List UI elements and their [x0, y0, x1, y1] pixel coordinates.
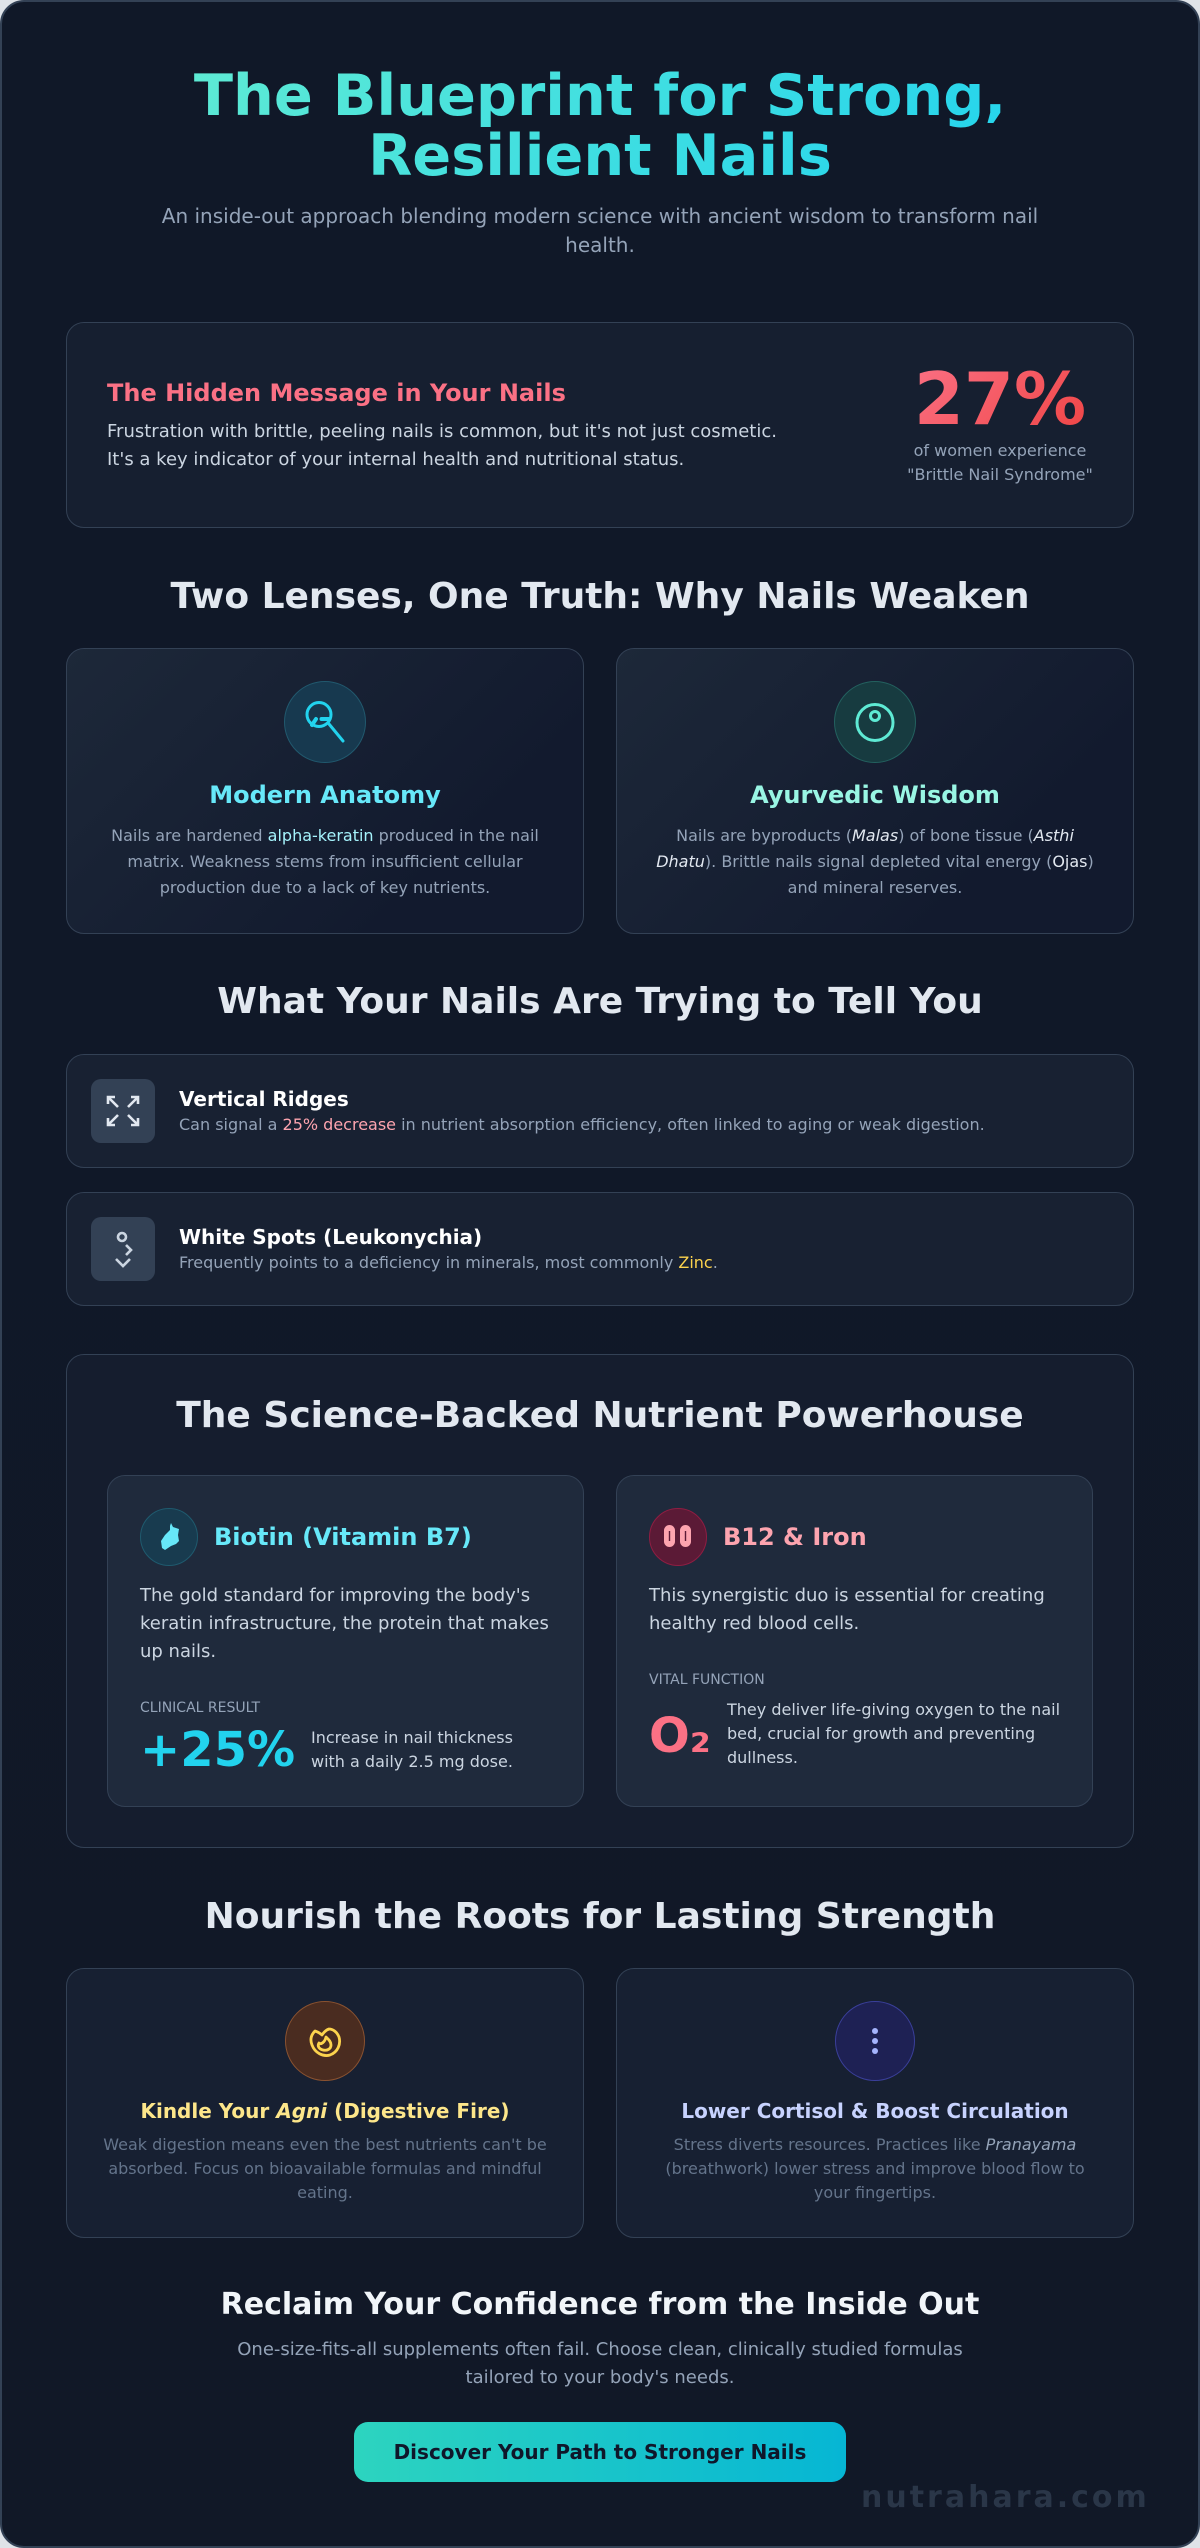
subtitle — [162, 204, 1038, 256]
clinical result text: Increase in nail thickness — [311, 1728, 513, 1747]
cortisol text: Stress diverts resources. Practices like Pranayama — [674, 2135, 1076, 2154]
icon: flame — [285, 2001, 365, 2081]
panel: biotin — [107, 1475, 584, 1807]
cortisol heading: Lower Cortisol & Boost Circulation — [681, 2099, 1069, 2123]
o2 symbol: O₂ — [649, 1708, 711, 1764]
modern anatomy text: production due to a lack of key nutrients. — [160, 878, 490, 897]
heading: two lenses: Two Lenses, One Truth: Why Nails Weaken — [170, 576, 1030, 617]
b12 text: This synergistic duo is essential for creating — [649, 1585, 1045, 1606]
cortisol text — [665, 2135, 1085, 2202]
biotin text: keratin infrastructure, the protein that makes — [140, 1613, 549, 1634]
panel: nutrient powerhouse — [66, 1354, 1134, 1848]
vertical ridges title: Vertical Ridges — [179, 1087, 349, 1111]
subtitle: health. — [565, 232, 635, 256]
panel: hidden message — [66, 322, 1134, 528]
modern anatomy text: Nails are hardened alpha-keratin produced in the nail — [111, 826, 539, 845]
cortisol text: your fingertips. — [814, 2183, 936, 2202]
icon: biotin — [140, 1508, 198, 1566]
call to action button: Discover Your Path to Stronger Nails — [394, 2440, 806, 2464]
biotin text: The gold standard for improving the body's — [140, 1585, 530, 1606]
vital function text: bed, crucial for growth and preventing — [727, 1724, 1035, 1743]
closing text: One-size-fits-all supplements often fail. Choose clean, clinically studied formulas — [237, 2339, 963, 2360]
hidden message text — [107, 421, 777, 470]
hidden message heading: The Hidden Message in Your Nails — [107, 379, 566, 407]
agni text: eating. — [297, 2183, 353, 2202]
biotin title: Biotin (Vitamin B7) — [214, 1523, 472, 1551]
b12 text: healthy red blood cells. — [649, 1613, 859, 1634]
b12 text — [648, 1585, 1045, 1634]
icon: capsules — [649, 1508, 707, 1566]
vital function text: They deliver life-giving oxygen to the nail — [727, 1700, 1060, 1719]
panel: white spots — [66, 1192, 1134, 1306]
biotin text: up nails. — [140, 1641, 216, 1662]
ayurvedic text — [656, 826, 1094, 897]
title — [194, 62, 1006, 189]
call to action button — [354, 2422, 846, 2482]
hidden message text: Frustration with brittle, peeling nails is common, but it's not just cosmetic. — [107, 421, 777, 442]
watermark: nutrahara.com — [861, 2480, 1150, 2515]
panel: modern anatomy — [66, 648, 584, 934]
panel: cortisol — [616, 1968, 1134, 2238]
agni text — [103, 2135, 547, 2202]
statistic 27%: 27% — [914, 357, 1086, 441]
icon: dots — [835, 2001, 915, 2081]
ayurvedic text: Dhatu). Brittle nails signal depleted vital energy (Ojas) — [656, 852, 1094, 871]
panel: agni — [66, 1968, 584, 2238]
vertical ridges text: Can signal a 25% decrease in nutrient absorption efficiency, often linked to aging or weak digestion. — [179, 1115, 985, 1134]
b12 title: B12 & Iron — [723, 1523, 867, 1551]
icon: spots and chevrons — [91, 1217, 155, 1281]
clinical result text — [311, 1728, 513, 1771]
hidden message text: It's a key indicator of your internal health and nutritional status. — [107, 449, 684, 470]
icon: expand arrows — [91, 1079, 155, 1143]
panel: vertical ridges — [66, 1054, 1134, 1168]
modern anatomy text: matrix. Weakness stems from insufficient cellular — [127, 852, 523, 871]
closing text: tailored to your body's needs. — [466, 2367, 734, 2388]
statistic caption — [907, 441, 1093, 484]
subtitle: An inside-out approach blending modern science with ancient wisdom to transform nail — [162, 204, 1038, 228]
ayurvedic text: and mineral reserves. — [788, 878, 962, 897]
modern anatomy text — [111, 826, 539, 897]
vital function text: dullness. — [727, 1748, 798, 1767]
vital function text — [726, 1700, 1060, 1767]
closing heading: Reclaim Your Confidence from the Inside Out — [221, 2287, 979, 2322]
statistic caption: of women experience — [914, 441, 1086, 460]
agni text: Weak digestion means even the best nutrients can't be — [103, 2135, 547, 2154]
white spots title: White Spots (Leukonychia) — [179, 1225, 482, 1249]
heading: powerhouse: The Science-Backed Nutrient Powerhouse — [176, 1395, 1024, 1436]
title: Resilient Nails — [368, 122, 832, 189]
clinical result text: with a daily 2.5 mg dose. — [311, 1752, 513, 1771]
cortisol text: (breathwork) lower stress and improve blood flow to — [665, 2159, 1085, 2178]
panel: ayurvedic wisdom — [616, 648, 1134, 934]
heading: nourish: Nourish the Roots for Lasting Strength — [205, 1896, 995, 1937]
vital function label: VITAL FUNCTION — [649, 1672, 765, 1688]
agni heading: Kindle Your Agni (Digestive Fire) — [140, 2099, 510, 2123]
statistic caption: "Brittle Nail Syndrome" — [907, 465, 1093, 484]
statistic +25%: +25% — [140, 1722, 295, 1778]
closing text — [237, 2339, 963, 2388]
panel: b12 and iron — [616, 1475, 1093, 1807]
title: The Blueprint for Strong, — [194, 62, 1006, 129]
clinical result label: CLINICAL RESULT — [140, 1700, 260, 1716]
icon: circle — [834, 681, 916, 763]
ayurvedic text: Nails are byproducts (Malas) of bone tissue (Asthi — [676, 826, 1074, 845]
white spots text: Frequently points to a deficiency in minerals, most commonly Zinc. — [179, 1253, 718, 1272]
biotin text — [140, 1585, 549, 1662]
ayurvedic heading: Ayurvedic Wisdom — [750, 781, 1000, 809]
agni text: absorbed. Focus on bioavailable formulas and mindful — [108, 2159, 542, 2178]
icon: magnifier — [284, 681, 366, 763]
modern anatomy heading: Modern Anatomy — [209, 781, 441, 809]
heading: signs: What Your Nails Are Trying to Tell You — [217, 981, 983, 1022]
